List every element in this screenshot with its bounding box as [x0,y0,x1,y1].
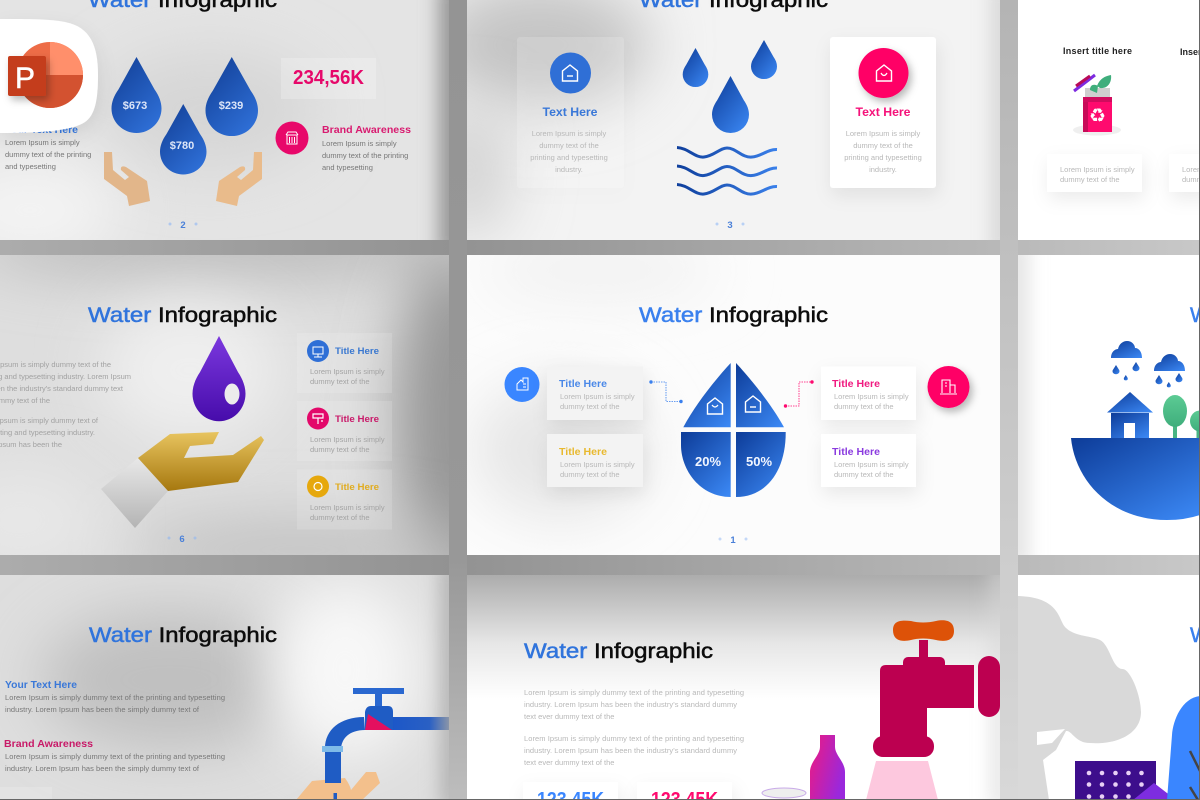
stat card: pink [637,782,732,800]
card: gold title: Title Here [335,482,379,493]
icon: PowerPoint logo on white blob: P [15,62,35,95]
text block: Your Text Here: Your Text Here [5,679,77,691]
card: pink: printing and typesetting [844,153,922,162]
card: pink title [297,401,392,461]
stat card: blue [523,782,618,800]
left text block: and typesetting [5,162,56,171]
building: purple dotted [1075,761,1176,800]
slide: recycle bin [1018,0,1200,240]
card: pink title: Title Here [832,379,880,390]
slide: village island [1018,255,1199,555]
card: pink: dummy text of the [853,141,913,150]
text block: Lorem Ipsum is simply dummy text of the printing and typesetting [524,688,744,697]
slide 2: three drops and hands [0,0,449,240]
card: blue title [547,366,643,420]
text: Brand Awareness: Lorem Ipsum is simply [322,139,397,148]
icon: PowerPoint logo on white blob [0,19,98,133]
card: blue: dummy text of the [539,141,599,150]
card: purple title: dummy text of the [834,470,894,479]
card: pink: Lorem Ipsum is simply [846,129,921,138]
slide background [1018,255,1199,555]
icon: purple drop [192,336,246,421]
slide background [0,560,462,800]
icon: bottle [810,735,845,800]
slide background [467,560,1006,800]
pagination [168,534,196,545]
drop: $239: $239 [219,100,243,112]
card: pink title: Title Here [335,414,379,425]
slide 3: rain and waves [467,0,1000,240]
card: gold title: dummy text of the [310,513,370,522]
text block: Your Text Here [5,679,225,714]
icon: glass [762,788,806,798]
card: gold title: Title Here [559,447,607,458]
card: blue title: Lorem Ipsum is simply [560,392,635,401]
card: pink title [821,366,916,420]
icon: house smile [708,398,722,414]
card text [1047,154,1142,192]
card: blue: Text Here [542,107,598,119]
slide 6: purple drop and gold hand [0,255,449,555]
drop: $780 [160,104,206,175]
left text block [0,360,131,449]
slide: dripping tap [0,560,462,800]
pagination [718,535,748,546]
card: pink [830,37,936,188]
text block: Your Text Here: industry. Lorem Ipsum has been the simply dummy text of [5,705,200,714]
text block [524,688,744,767]
water cone [866,761,938,800]
text block: Your Text Here: Lorem Ipsum is simply dummy text of the printing and typesetting [5,693,225,702]
clouds and rain [1111,341,1185,387]
drop: $239 [206,57,258,136]
icon: left hand [104,152,150,206]
card: blue: Lorem Ipsum is simply [532,129,607,138]
slide 1: main segmented drop [467,240,1000,555]
icon: pink building badge [928,366,970,408]
text block: Brand Awareness: industry. Lorem Ipsum has been the simply dummy text of [5,764,200,773]
card: gold title [297,470,392,530]
segment: bottom right: 50% [746,454,772,469]
icon: crimson faucet [873,620,1000,757]
slide background [1018,575,1200,800]
segment: bottom left: 20% [695,454,721,469]
left text block [5,124,91,171]
icon: gold hand with cuff [101,432,264,528]
card: gold title: Lorem Ipsum is simply [310,503,385,512]
card: blue title: Title Here [335,346,379,357]
icon: trees [1163,395,1200,438]
card text: Lorem Ipsum is simply [1060,165,1135,174]
pagination: 3 [727,220,733,231]
icon: right hand [216,152,262,206]
card: pink title: Lorem Ipsum is simply [310,435,385,444]
text block: industry. Lorem Ipsum has been the industry's standard dummy [524,700,737,709]
stat box: 234,56K: 234,56K [293,67,365,89]
heading: Insert title here [1063,46,1132,56]
left text block: dummy text of the printing [5,150,91,159]
drop: $673: $673 [123,100,147,112]
text: Brand Awareness: Brand Awareness [322,124,411,136]
faint card [0,787,52,800]
text block: Brand Awareness: Lorem Ipsum is simply dummy text of the printing and typesetting [5,752,225,761]
card: blue title: Title Here [559,379,607,390]
stat box: 234,56K [281,58,376,99]
pagination: 6 [179,534,185,545]
text: Brand Awareness [322,124,411,172]
second card, cut off [1169,154,1200,192]
card: gold title: dummy text of the [560,470,620,479]
segment: top left [683,363,731,427]
card: pink: Text Here [856,107,910,119]
pagination: 2 [180,220,186,231]
drops [683,40,777,133]
card: blue: printing and typesetting [530,153,608,162]
slide: crimson tap [467,560,1006,800]
left text block: Your Text Here [5,124,78,136]
icon: recycle bin with leaves [1073,75,1121,136]
slide background [467,0,1000,240]
slide background [0,255,449,555]
slide background [1018,0,1200,240]
text: Brand Awareness: dummy text of the printing [322,151,408,160]
drop: $780: $780 [170,140,194,152]
card: purple title: Lorem Ipsum is simply [834,460,909,469]
card: purple title: Title Here [832,447,880,458]
text block: text ever dummy text of the [524,758,614,767]
icon: storefront badge [276,122,308,154]
text block: Brand Awareness [4,738,225,773]
icon: grey tree [1018,596,1141,800]
icon: blue faucet [322,688,449,800]
card: blue [517,37,624,188]
slide background [467,240,1000,555]
text block: industry. Lorem Ipsum has been the industry's standard dummy [524,746,737,755]
drop: $673 [112,57,162,133]
card: pink: industry. [869,165,897,174]
card: blue title: dummy text of the [560,402,620,411]
icon: hand [296,772,380,800]
segmented water drop [681,363,786,497]
connector: right [784,380,814,408]
text block: Brand Awareness: Brand Awareness [4,738,93,750]
waves [677,148,777,194]
slide background [0,0,449,240]
title: Water Infographic [89,624,277,647]
segment: top right [736,363,784,427]
left text block: Lorem Ipsum is simply [5,138,80,147]
icon: recycle bin with leaves: ♻ [1089,105,1106,127]
card text: dummy text of the [1060,175,1120,184]
card: blue title: Lorem Ipsum is simply [310,367,385,376]
text: Brand Awareness: and typesetting [322,163,373,172]
title: Water Infographic [88,304,277,327]
title: Water Infographic [524,640,713,663]
icon: house [1107,392,1153,438]
pagination [168,220,198,231]
text block: text ever dummy text of the [524,712,614,721]
icon: house line [746,396,760,412]
pagination: 1 [730,535,736,546]
card: blue title: dummy text of the [310,377,370,386]
card: pink title: dummy text of the [834,402,894,411]
card: gold title: Lorem Ipsum is simply [560,460,635,469]
connector: left [649,380,683,403]
card: blue: industry. [555,165,583,174]
card: purple title [821,434,916,487]
card: gold title [547,434,643,487]
title: Water Infographic [639,304,828,327]
icon: blue building badge [504,367,540,402]
pagination [716,220,744,231]
slide: tree and buildings [1018,575,1200,800]
card: pink title: Lorem Ipsum is simply [834,392,909,401]
text block: Lorem Ipsum is simply dummy text of the printing and typesetting [524,734,744,743]
island bowl [1071,438,1200,520]
building: blue arch [1167,696,1200,800]
card: pink title: dummy text of the [310,445,370,454]
card: blue title [297,333,392,393]
